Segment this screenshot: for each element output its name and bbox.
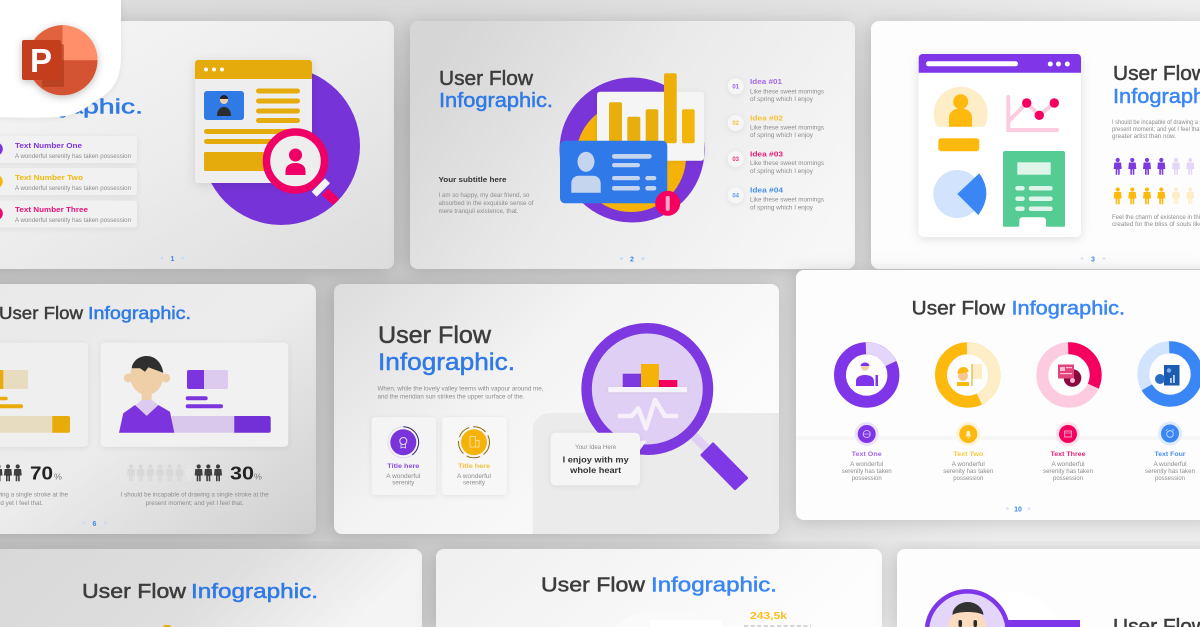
card: purple title here: Title here bbox=[387, 463, 420, 470]
panel: bottom right slide bbox=[897, 549, 1200, 627]
list item: idea 03 bbox=[728, 150, 824, 175]
stat: 30 percent: % bbox=[254, 472, 262, 482]
step: text two bbox=[943, 422, 993, 482]
panel: slide 2 bbox=[410, 21, 855, 269]
list item: idea 02: of spring which I enjoy bbox=[750, 133, 813, 139]
list item: idea 02: 02 bbox=[732, 121, 740, 127]
pagination: 6 bbox=[82, 521, 107, 528]
text block: subtitle and body: absorbed in the exquisite sense of bbox=[438, 201, 534, 207]
list item: idea 02: Idea #02 bbox=[750, 114, 783, 123]
step: text three: Text Three bbox=[1050, 451, 1086, 458]
step: text two: Text Two bbox=[953, 451, 983, 458]
stat: 30 percent bbox=[230, 464, 262, 484]
list item: idea 04: of spring which I enjoy bbox=[750, 206, 813, 212]
card: yellow title here: Title here bbox=[458, 463, 490, 470]
heading: bottom center title: Infographic. bbox=[651, 574, 777, 596]
text block: 30 percent caption: I should be incapable of drawing a single stroke at the bbox=[121, 492, 269, 498]
stat: 70 percent: 70 bbox=[30, 464, 53, 484]
text block: 30 percent caption: present moment; and yet I feel that. bbox=[146, 501, 244, 507]
list item: idea 02: Like these sweet mornings bbox=[750, 126, 824, 132]
text block: 70 percent caption bbox=[0, 492, 69, 507]
step: text three: A wonderful bbox=[1052, 462, 1084, 468]
text block: slide 3 intro bbox=[1112, 120, 1200, 140]
step: text four: Text Four bbox=[1154, 451, 1186, 458]
list item: idea 04: Like these sweet mornings bbox=[750, 198, 824, 204]
heading: bottom left title bbox=[82, 581, 318, 603]
stat: 243,5k: 243,5k bbox=[750, 611, 788, 622]
card: yellow title here: serenity bbox=[463, 480, 485, 486]
heading: slide 2 title bbox=[439, 68, 553, 112]
pagination: 10 bbox=[1006, 506, 1030, 514]
list row: text number two bbox=[0, 168, 137, 195]
heading: slide 3 title bbox=[1113, 63, 1200, 108]
pagination: 3 bbox=[1080, 256, 1106, 264]
background panel: lower right bbox=[533, 413, 779, 534]
panel: slide 3 bbox=[871, 21, 1200, 269]
list row: text number three: Text Number Three bbox=[15, 207, 88, 214]
list row: text number two: A wonderful serenity has taken possession bbox=[15, 186, 131, 192]
heading: slide 5 title bbox=[378, 322, 515, 376]
donut chart: blue bbox=[1143, 347, 1197, 401]
step: text two: A wonderful bbox=[952, 462, 985, 468]
heading: slide 1 title fragment: phic. bbox=[83, 96, 143, 118]
text block: slide 5 body bbox=[378, 386, 544, 400]
card: yellow title here: A wonderful bbox=[457, 474, 491, 480]
heading: bottom left title: Infographic. bbox=[191, 581, 318, 603]
panel: slide 10 bbox=[796, 270, 1200, 520]
step: text three bbox=[1043, 422, 1093, 482]
pagination: 10: 10 bbox=[1014, 506, 1022, 514]
illustration: profile window with magnifier bbox=[195, 60, 360, 225]
card: right profile bbox=[101, 343, 288, 447]
step: text two: serenity has taken bbox=[943, 469, 993, 475]
illustration: chart and id card bbox=[560, 73, 704, 222]
panel: bottom center slide bbox=[436, 549, 882, 627]
pictogram: 30 percent people bbox=[127, 464, 222, 481]
card: left profile bbox=[0, 343, 88, 447]
panel: slide 1 bbox=[0, 21, 394, 269]
panel: slide 6 bbox=[0, 284, 316, 534]
pagination: 2 bbox=[620, 256, 644, 264]
callout: idea bubble: Your Idea Here bbox=[575, 445, 617, 451]
heading: slide 10 title: Infographic. bbox=[1012, 298, 1125, 320]
heading: slide 1 title fragment bbox=[28, 96, 143, 118]
text block: slide 5 body: and the meridian sun strikes the upper surface of the. bbox=[378, 394, 525, 400]
heading: slide 6 title: User Flow bbox=[0, 303, 83, 323]
list row: text number one bbox=[0, 136, 137, 163]
heading: slide 5 title: User Flow bbox=[378, 322, 492, 349]
heading: slide 6 title: Infographic. bbox=[88, 303, 191, 323]
illustration: magnifier with chart and pulse bbox=[587, 328, 746, 488]
heading: slide 10 title: User Flow bbox=[912, 298, 1005, 320]
list row: text number one: Text Number One bbox=[15, 143, 82, 150]
list row: text number two: Text Number Two bbox=[15, 175, 83, 182]
step: text four bbox=[1145, 422, 1195, 482]
list item: idea 01: Idea #01 bbox=[750, 77, 782, 86]
list row: text number three: A wonderful serenity has taken possession bbox=[15, 218, 131, 224]
card: purple title here: A wonderful bbox=[386, 474, 420, 480]
heading: slide 5 title: Infographic. bbox=[378, 349, 515, 376]
text block: slide 3 intro: greater artist than now. bbox=[1112, 134, 1176, 140]
heading: bottom center title bbox=[541, 574, 777, 596]
card: purple title here: serenity bbox=[392, 480, 414, 486]
text block: slide 5 body: When, while the lovely valley teems with vapour around me, bbox=[378, 386, 544, 392]
step: text one: A wonderful bbox=[850, 462, 883, 468]
card: purple title here bbox=[372, 417, 436, 495]
stat: 70 percent bbox=[30, 464, 62, 484]
list item: idea 01: of spring which I enjoy bbox=[750, 97, 813, 103]
step: text three: serenity has taken bbox=[1043, 469, 1093, 475]
heading: slide 10 title bbox=[912, 298, 1125, 320]
step: text one: Text One bbox=[852, 451, 882, 458]
illustration: person in magnifier bbox=[927, 591, 1080, 627]
stat: 30 percent: 30 bbox=[230, 464, 254, 484]
list item: idea 01: 01 bbox=[732, 84, 740, 90]
pagination: 1 bbox=[160, 256, 184, 263]
callout: idea bubble: I enjoy with my bbox=[563, 456, 629, 464]
step: text four: serenity has taken bbox=[1145, 469, 1195, 475]
chart shape: white folder bbox=[617, 613, 722, 627]
donut chart: pink bbox=[1042, 348, 1096, 402]
donut chart: purple bbox=[840, 348, 893, 402]
step: text one bbox=[842, 422, 892, 482]
callout: idea bubble bbox=[551, 433, 647, 485]
heading: slide 6 title bbox=[0, 303, 191, 323]
list item: idea 02 bbox=[728, 114, 824, 139]
callout: idea bubble: whole heart bbox=[569, 466, 622, 475]
step: text four: A wonderful bbox=[1154, 462, 1186, 468]
text block: subtitle and body: Your subtitle here bbox=[438, 175, 506, 184]
list item: idea 01 bbox=[728, 77, 824, 103]
card: yellow title here bbox=[442, 417, 507, 495]
icon: PowerPoint logo: P bbox=[30, 42, 52, 79]
heading: slide 2 title: Infographic. bbox=[439, 90, 553, 112]
pagination: 1: 1 bbox=[171, 256, 175, 263]
list item: idea 03: 03 bbox=[732, 157, 740, 163]
heading: bottom center title: User Flow bbox=[541, 574, 646, 596]
text block: 30 percent caption bbox=[121, 492, 269, 507]
step: text one: possession bbox=[852, 476, 882, 482]
pictogram row: dots bbox=[744, 625, 811, 627]
panel: bottom left slide bbox=[0, 549, 422, 627]
pagination: 6: 6 bbox=[93, 521, 97, 528]
pictogram: 70 percent people bbox=[0, 464, 22, 481]
pagination: 2: 2 bbox=[630, 256, 634, 264]
text block: subtitle and body: mere tranquil existence, that. bbox=[438, 209, 519, 215]
heading: slide 1 title fragment: Infogra bbox=[28, 96, 84, 118]
list row: text number three bbox=[0, 200, 137, 228]
pagination: 3: 3 bbox=[1091, 256, 1095, 264]
badge: PowerPoint tab bbox=[0, 0, 121, 118]
list item: idea 04 bbox=[728, 186, 824, 212]
text block: subtitle and body bbox=[438, 175, 534, 215]
chart top marker bbox=[163, 625, 171, 627]
list item: idea 03: Idea #03 bbox=[750, 150, 783, 159]
step: text one: serenity has taken bbox=[842, 469, 892, 475]
pictogram: purple people bbox=[1114, 158, 1194, 175]
illustration: dashboard window bbox=[919, 54, 1081, 237]
list item: idea 03: Like these sweet mornings bbox=[750, 161, 824, 167]
text block: slide 3 caption bbox=[1112, 215, 1200, 228]
heading: slide 2 title: User Flow bbox=[439, 68, 534, 90]
heading: bottom left title: User Flow bbox=[82, 581, 187, 603]
step: text three: possession bbox=[1053, 476, 1083, 482]
list item: idea 04: 04 bbox=[732, 194, 740, 200]
list item: idea 01: Like these sweet mornings bbox=[750, 89, 824, 95]
step: text two: possession bbox=[953, 476, 983, 482]
panel: slide 5 bbox=[334, 284, 779, 534]
text block: subtitle and body: I am so happy, my dear friend, so bbox=[438, 193, 530, 199]
list row: text number one: A wonderful serenity has taken possession bbox=[15, 154, 131, 160]
list item: idea 04: Idea #04 bbox=[750, 186, 784, 195]
stat: 70 percent: % bbox=[54, 472, 62, 482]
pictogram: yellow people bbox=[1114, 187, 1194, 204]
list item: idea 03: of spring which I enjoy bbox=[750, 169, 813, 175]
donut chart: yellow bbox=[941, 348, 994, 402]
step: text four: possession bbox=[1155, 476, 1185, 482]
